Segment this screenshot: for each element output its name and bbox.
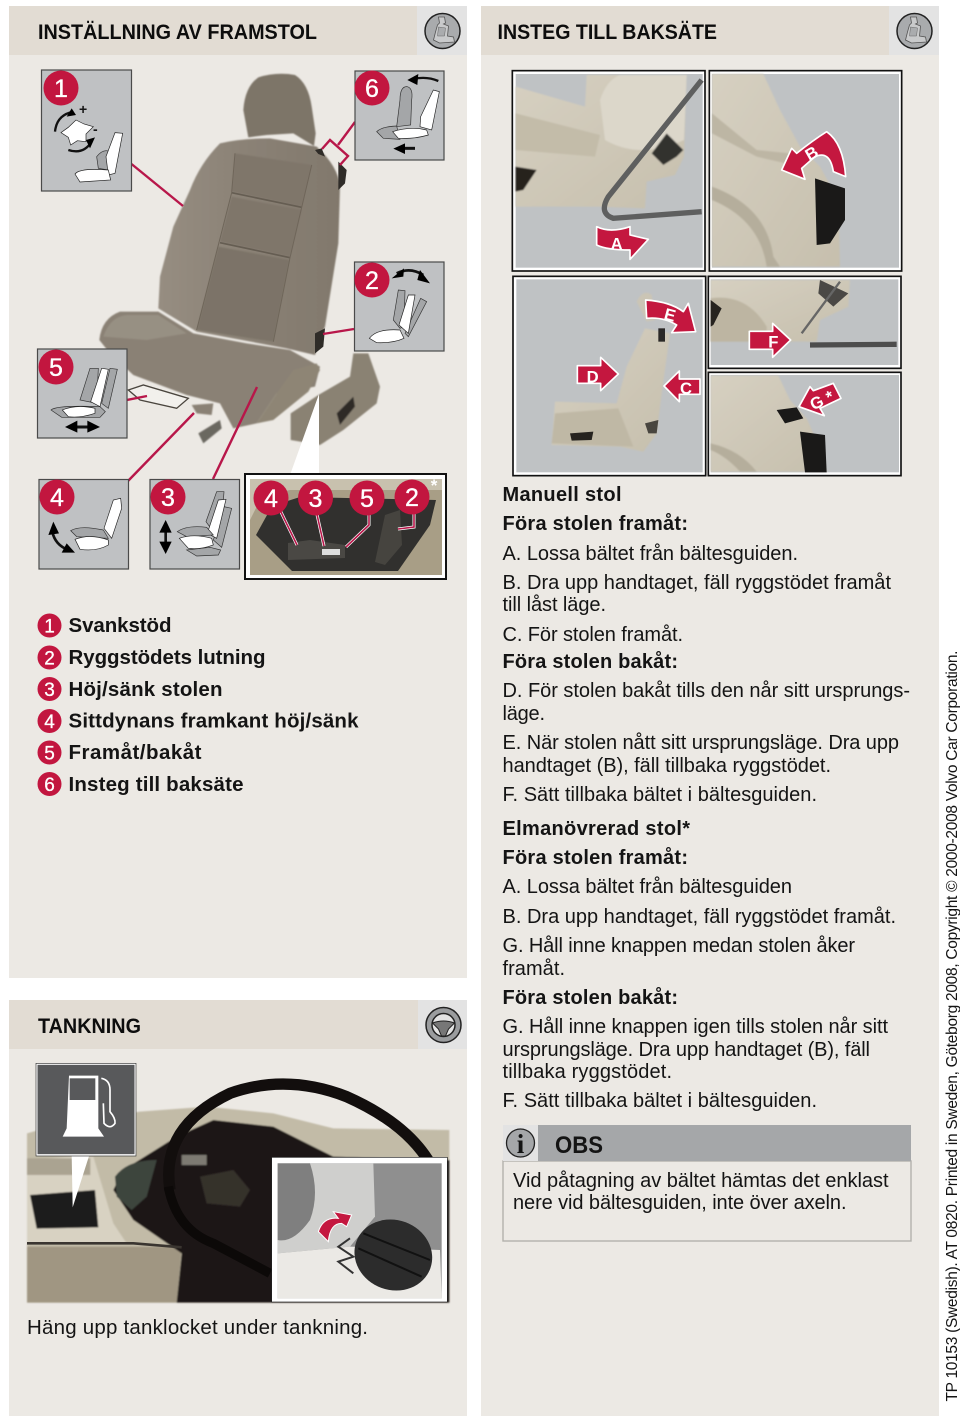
text: tankning caption: Häng upp tanklocket under tankning.	[27, 1316, 368, 1339]
heading: Inställning av framstol	[9, 6, 467, 55]
legend: seat functions: Svankstöd	[68, 614, 172, 637]
text: elmanövrerad stol instructions: F. Sätt tillbaka bältet i bältesguiden.	[502, 1090, 817, 1112]
text: elmanövrerad stol instructions: G. Håll inne knappen igen tills stolen når sitt	[502, 1016, 888, 1038]
photo: electric controls	[245, 474, 446, 579]
photo: electric controls: 3	[309, 485, 322, 513]
icon box 5: framåt/bakåt: 5	[49, 354, 63, 382]
panel: background right	[481, 6, 939, 1416]
legend: seat functions: Framåt/bakåt	[68, 741, 202, 764]
photo A: A	[611, 234, 623, 253]
legend: seat functions	[38, 614, 359, 796]
photo: electric controls: 5	[360, 485, 374, 513]
icon box 6: insteg	[354, 70, 444, 160]
text: manuell stol instructions: till låst läge.	[502, 594, 606, 616]
legend: seat functions: 3	[44, 680, 55, 701]
photo F: F	[768, 332, 778, 351]
callout: OBS note: i	[517, 1129, 525, 1159]
icon: seat badge left	[425, 14, 460, 48]
icon box 2: ryggstöd: 2	[365, 267, 379, 295]
photo: electric controls: *	[431, 476, 438, 495]
icon: steering wheel badge	[426, 1008, 461, 1042]
icon box 1: svankstöd: 1	[54, 75, 68, 103]
callout: OBS note: nere vid bältesguiden, inte över axeln.	[513, 1192, 846, 1214]
text: manuell stol instructions	[502, 484, 910, 806]
photo: electric controls: 4	[264, 485, 278, 513]
icon box 5: framåt/bakåt	[38, 349, 127, 438]
text: manuell stol instructions: D. För stolen bakåt tills den når sitt ursprungs-	[502, 680, 910, 702]
callout: fuel pump icon	[36, 1063, 136, 1207]
panel: background left top	[9, 6, 467, 978]
text: elmanövrerad stol instructions: Föra stolen framåt:	[502, 846, 688, 869]
text: elmanövrerad stol instructions	[502, 818, 896, 1112]
icon box 4: sittdynans framkant	[39, 480, 128, 569]
photo: electric controls: 2	[405, 484, 419, 512]
callout: OBS note: OBS	[555, 1132, 603, 1159]
icon box 1: svankstöd	[42, 70, 132, 191]
heading: Inställning av framstol: INSTÄLLNING AV FRAMSTOL	[38, 21, 317, 44]
heading: Insteg till baksäte	[481, 6, 939, 55]
legend: seat functions: 5	[44, 744, 55, 764]
text: manuell stol instructions: handtaget (B), fäll tillbaka ryggstödet.	[502, 755, 831, 777]
heading: Tankning: TANKNING	[38, 1015, 141, 1038]
photo G: G *	[807, 387, 837, 414]
icon box 1: svankstöd: -	[93, 121, 98, 137]
text: elmanövrerad stol instructions: G. Håll inne knappen medan stolen åker	[502, 935, 855, 957]
text: manuell stol instructions: Föra stolen bakåt:	[502, 650, 678, 673]
icon box 3: höj/sänk: 3	[161, 484, 175, 512]
photos: insteg steps	[512, 71, 902, 476]
heading: Insteg till baksäte: INSTEG TILL BAKSÄTE	[498, 21, 717, 44]
photo A	[512, 71, 705, 271]
legend: seat functions: Ryggstödets lutning	[68, 646, 266, 669]
text: manuell stol instructions: F. Sätt tillbaka bältet i bältesguiden.	[502, 784, 817, 806]
text: manuell stol instructions: B. Dra upp handtaget, fäll ryggstödet framåt	[502, 572, 891, 594]
icon box 6: insteg: 6	[365, 75, 379, 103]
inset: fuel cap photo	[272, 1157, 447, 1302]
callout: OBS note	[503, 1125, 911, 1241]
legend: seat functions: 4	[44, 712, 55, 733]
text: manuell stol instructions: A. Lossa bältet från bältesguiden.	[502, 543, 798, 565]
text: manuell stol instructions: E. När stolen nått sitt ursprungsläge. Dra upp	[502, 732, 899, 754]
text: elmanövrerad stol instructions: B. Dra upp handtaget, fäll ryggstödet framåt.	[502, 906, 896, 928]
legend: seat functions: Höj/sänk stolen	[68, 678, 222, 701]
photo B: B	[802, 142, 822, 165]
icon box 1: svankstöd: +	[79, 101, 87, 117]
text: manuell stol instructions: C. För stolen framåt.	[502, 624, 683, 646]
photo D C E: C	[680, 379, 692, 398]
photo B	[709, 71, 902, 271]
legend: seat functions: 1	[44, 616, 55, 638]
photo D C E: D	[587, 367, 599, 386]
icon: seat badge right	[897, 14, 932, 48]
legend: seat functions: Sittdynans framkant höj/sänk	[68, 710, 359, 732]
heading: Tankning	[9, 1000, 467, 1049]
text: elmanövrerad stol instructions: tillbaka ryggstödet.	[502, 1061, 672, 1083]
text: elmanövrerad stol instructions: framåt.	[502, 958, 565, 980]
legend: seat functions: Insteg till baksäte	[68, 773, 244, 796]
panel: background tankning	[9, 1000, 467, 1416]
text: elmanövrerad stol instructions: Elmanövrerad stol*	[502, 818, 690, 840]
text: manuell stol instructions: Föra stolen framåt:	[502, 512, 688, 535]
photo D C E: E	[662, 305, 678, 326]
icon box 3: höj/sänk	[150, 480, 240, 569]
legend: seat functions: 6	[44, 775, 55, 796]
text: elmanövrerad stol instructions: Föra stolen bakåt:	[502, 986, 678, 1009]
photo F	[708, 276, 901, 368]
callout: OBS note: Vid påtagning av bältet hämtas det enklast	[513, 1170, 889, 1192]
illustration: front seat	[99, 74, 380, 445]
text: elmanövrerad stol instructions: ursprungsläge. Dra upp handtaget (B), fäll	[502, 1039, 870, 1061]
leader lines	[127, 122, 355, 481]
icon box 2: ryggstöd	[354, 262, 444, 351]
photo G	[708, 372, 901, 476]
legend: seat functions: 2	[44, 648, 55, 670]
text: elmanövrerad stol instructions: A. Lossa bältet från bältesguiden	[502, 876, 792, 898]
photo D C E	[513, 276, 706, 476]
photo: dashboard	[27, 1084, 449, 1303]
text: manuell stol instructions: läge.	[502, 703, 545, 725]
text: manuell stol instructions: Manuell stol	[502, 484, 622, 506]
callout: pointer to controls	[290, 394, 319, 475]
icon box 4: sittdynans framkant: 4	[50, 484, 64, 512]
